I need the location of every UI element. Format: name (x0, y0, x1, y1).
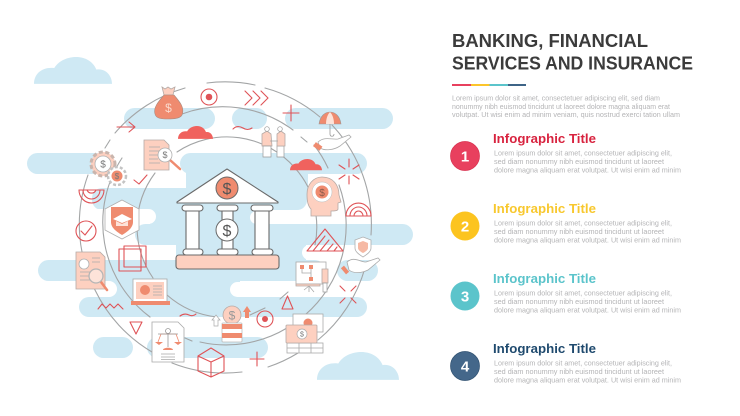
icon: hand with shield (341, 237, 380, 274)
icon: check circle (76, 221, 96, 241)
icon: half arcs left (79, 190, 104, 203)
icon: document with magnifier two (76, 252, 107, 290)
item 1 (450, 131, 681, 174)
bank columns (182, 205, 273, 255)
icon: money bag: $ (165, 101, 172, 115)
item 3 text: sed diam nonummy nibh euismod tincidunt ut laoreet (494, 297, 664, 306)
icon: banknotes and stack (286, 314, 323, 353)
icon: zigzag (98, 304, 123, 309)
item 1 text (494, 148, 681, 174)
item 1 text: Lorem ipsum dolor sit amet, consectetuer adipiscing elit, (494, 148, 672, 158)
icon: solid cloud right (290, 159, 322, 170)
item 2 heading: Infographic Title (493, 201, 596, 216)
item 2 text: Lorem ipsum dolor sit amet, consectetuer adipiscing elit, (494, 218, 672, 228)
item 3 text: dolore magna aliquam erat volutpat. Ut wisi enim ad minim (494, 306, 681, 314)
intro paragraph: volutpat. Ut wisi enim ad minim veniam, quis nostrud exerci tation ullam (452, 110, 680, 119)
icon: gears: $ (115, 172, 120, 181)
item 1 text: sed diam nonummy nibh euismod tincidunt ut laoreet (494, 157, 664, 166)
icon: cube (198, 348, 224, 377)
icon: sparks upper (339, 159, 359, 184)
icon: hexagon shield (105, 200, 139, 239)
icon: head with dollar: $ (319, 188, 325, 199)
icon: arrow (117, 122, 135, 132)
item 3 text: Lorem ipsum dolor sit amet, consectetuer adipiscing elit, (494, 288, 672, 298)
icon: gears: $ (100, 160, 106, 170)
icon: triangle down (130, 322, 142, 334)
icon: target lower (257, 311, 273, 327)
icon: wave top (233, 127, 252, 130)
title: SERVICES AND INSURANCE (452, 54, 693, 74)
item 2 text: sed diam nonummy nibh euismod tincidunt ut laoreet (494, 227, 664, 236)
icon: triangle up (282, 296, 293, 309)
bank dollar coin top: $ (223, 181, 232, 198)
icon: plus top (283, 105, 299, 121)
number badge 1 (450, 142, 480, 170)
item 4 text: Lorem ipsum dolor sit amet, consectetuer adipiscing elit, (494, 358, 672, 368)
item 4 text (494, 358, 681, 384)
number badge 4: 4 (461, 358, 470, 376)
icon: overlapping squares (119, 246, 146, 271)
colour divider (452, 84, 526, 86)
item 3 text (494, 288, 681, 314)
icon: gears (91, 152, 126, 185)
item 1 text: dolore magna aliquam erat volutpat. Ut wisi enim ad minim (494, 166, 681, 174)
icon: presentation board with presenter (296, 262, 328, 292)
title (452, 31, 693, 74)
icon: check (134, 175, 147, 184)
number badge 3 (450, 282, 480, 310)
item 4 text: sed diam nonummy nibh euismod tincidunt ut laoreet (494, 367, 664, 376)
bank roof (177, 169, 278, 203)
intro paragraph: nonummy nibh euismod tincidunt ut laoreet dolore magna aliquam erat (452, 102, 670, 111)
title: BANKING, FINANCIAL (452, 31, 648, 51)
item 2 text: dolore magna aliquam erat volutpat. Ut wisi enim ad minim (494, 236, 681, 244)
icon: banknotes and stack: $ (300, 332, 304, 338)
intro paragraph (452, 94, 680, 119)
icon: document with magnifier (144, 140, 180, 170)
number badge 2 (450, 212, 480, 240)
icon: legal document with scales (152, 322, 184, 362)
icon: business people handshake (262, 127, 285, 157)
item 2 (450, 201, 681, 244)
number badge 3: 3 (461, 288, 469, 306)
icon: wave lower (180, 314, 196, 316)
icon: laptop (131, 279, 170, 305)
item 4 (450, 341, 681, 384)
intro paragraph: Lorem ipsum dolor sit amet, consectetuer adipiscing elit, sed diam (452, 94, 660, 102)
icon: sparks lower (340, 286, 356, 303)
icon: chevrons (245, 91, 268, 105)
icon: coin stack with arrows: $ (229, 308, 236, 322)
icon: money bag (155, 87, 183, 119)
number badge 2: 2 (461, 218, 469, 236)
icon: red arch (346, 203, 371, 216)
icon: coin stack with arrows (212, 306, 251, 342)
item 1 heading: Infographic Title (493, 131, 596, 146)
item 3 heading: Infographic Title (493, 271, 596, 286)
background clouds and bands (27, 57, 413, 380)
icon: hand with umbrella (313, 112, 351, 151)
icon: target top (201, 89, 217, 105)
bank base (176, 255, 279, 269)
bank dollar coin middle: $ (223, 223, 232, 240)
item 3 (450, 271, 681, 314)
number badge 1: 1 (461, 148, 469, 166)
number badge 4 (450, 352, 480, 380)
icon: document with magnifier: $ (162, 150, 168, 160)
icon: hatched triangle (307, 229, 343, 251)
item 4 heading: Infographic Title (493, 341, 596, 356)
item 2 text (494, 218, 681, 244)
concentric dashed rings (79, 82, 371, 373)
icon: head with dollar (307, 177, 341, 216)
icon: plus lower (250, 352, 264, 366)
item 4 text: dolore magna aliquam erat volutpat. Ut wisi enim ad minim (494, 376, 681, 384)
central bank building (176, 169, 279, 269)
icon: solid cloud left (178, 126, 213, 139)
